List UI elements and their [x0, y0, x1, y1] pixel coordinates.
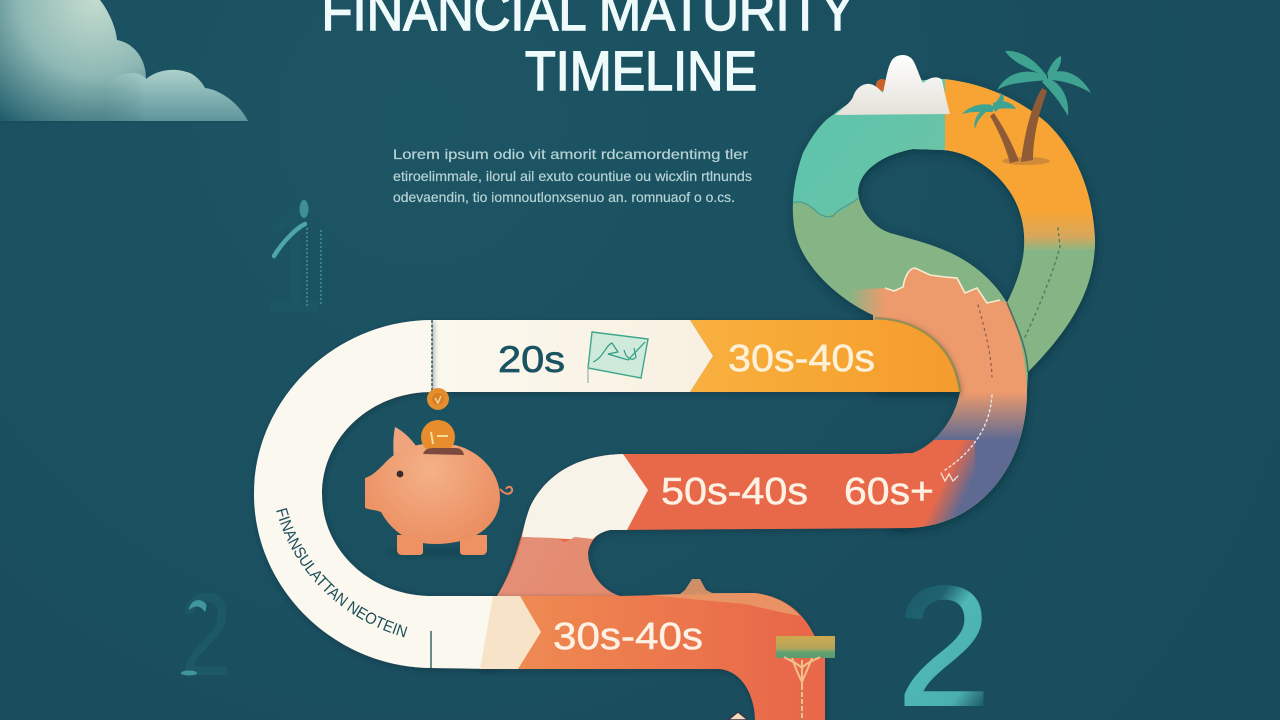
dotted route	[941, 228, 1060, 481]
middle timeline band	[497, 454, 912, 596]
signpost tree icon	[776, 636, 835, 720]
age label 50s-40s: 50s-40s	[661, 471, 808, 513]
top timeline band	[432, 320, 960, 392]
diamond marker	[728, 712, 748, 720]
intro paragraph: Lorem ipsum odio vit amorit rdcamordentimg tler	[393, 146, 748, 162]
age label 30s-40s bottom: 30s-40s	[553, 616, 703, 658]
bottom timeline band	[480, 579, 825, 720]
curved road caption: FINANSULATTAN NEOTEIN	[276, 508, 408, 638]
flag chart icon	[588, 332, 648, 383]
crack line between teal and green	[792, 198, 858, 217]
orange zone	[945, 79, 1095, 250]
peach edge highlight	[885, 268, 1000, 303]
timeline divider lines	[431, 320, 432, 668]
age label 30s-40s top: 30s-40s	[728, 338, 875, 380]
teal zone	[792, 79, 946, 217]
intro paragraph: odevaendin, tio iomnoutlonxsenuo an. romnuaof o o.cs.	[393, 189, 735, 205]
S-curve road upper section	[791, 79, 1098, 532]
title	[322, 0, 854, 102]
terrain bumps	[650, 579, 800, 616]
faint numeral 1: 1	[262, 176, 324, 344]
cloud illustration	[0, 0, 248, 123]
intro paragraph	[393, 146, 752, 205]
age label 20s: 20s	[498, 339, 565, 380]
road edge shadow	[1007, 303, 1028, 372]
piggy bank	[365, 420, 512, 557]
faint numeral 2 left: 2	[180, 569, 232, 701]
slate zone	[894, 395, 1026, 528]
salmon terrain	[497, 537, 620, 596]
white curved road	[254, 320, 495, 669]
cream segment	[432, 320, 713, 392]
peach zone	[850, 268, 1027, 540]
red blend into slate	[890, 440, 975, 528]
falling coin	[427, 388, 449, 410]
white chevron on middle band	[522, 454, 648, 540]
cream chevron on bottom band	[480, 596, 541, 669]
title: TIMELINE	[525, 39, 757, 102]
mountain illustration	[835, 55, 950, 115]
age label 60s+: 60s+	[844, 471, 934, 513]
palm trees	[962, 51, 1091, 165]
intro paragraph: etiroelimmale, ilorul ail exuto countiue ou wicxlin rtlnunds	[393, 168, 752, 184]
